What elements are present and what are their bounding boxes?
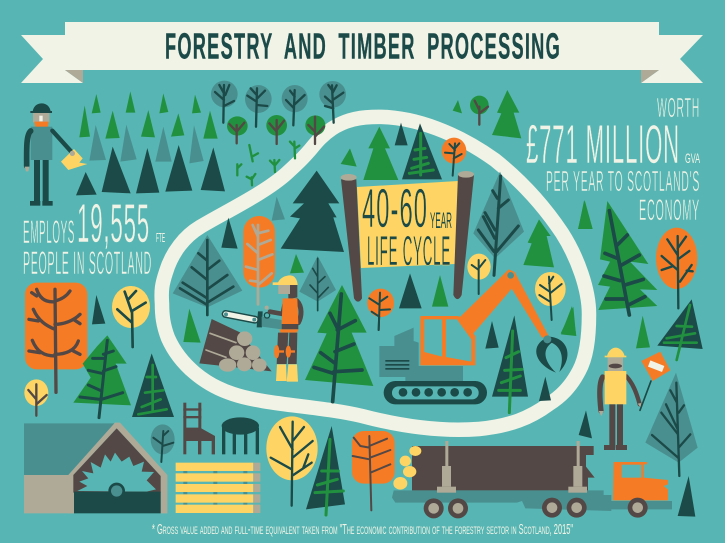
green sprouts — [237, 142, 299, 185]
orange tree by sign — [442, 138, 466, 176]
row of green round trees — [227, 115, 325, 144]
small triangle trees near spruce — [183, 197, 304, 343]
sign: life cycle: 40-60 — [362, 177, 428, 239]
orange oval tree right — [656, 228, 697, 308]
orange tree bottom — [352, 431, 395, 510]
green fir left — [73, 335, 131, 418]
stat: worth 771 million — [526, 92, 700, 227]
small conifer plantation — [76, 91, 225, 195]
dark conifer with green branches — [402, 123, 442, 179]
dark conifer with green branches left — [132, 353, 174, 417]
title banner — [21, 22, 703, 83]
sign right post — [453, 171, 474, 299]
small dark triangle left — [92, 295, 105, 324]
small green triangles right — [578, 201, 650, 348]
orange tree with khaki branches — [243, 216, 275, 304]
text: FTE — [156, 230, 165, 245]
truck stakes — [437, 441, 587, 493]
truck cab — [613, 462, 668, 500]
sign: life cycle: YEAR — [430, 208, 452, 233]
excavator boom and arm — [459, 269, 549, 338]
worker with stop sign — [599, 348, 670, 450]
excavator tracks — [384, 381, 487, 404]
small teal tree by sawmill — [151, 424, 175, 462]
small green tri top — [453, 100, 462, 113]
yellow small tree — [467, 254, 491, 294]
green spruce top right — [492, 90, 521, 138]
small yellow tree left — [24, 379, 48, 416]
text: 19,555 — [77, 192, 150, 254]
small dark trees bottom right — [579, 410, 695, 517]
lumberjack — [265, 275, 301, 382]
big orange tree left — [25, 283, 87, 392]
teal pine tree left — [173, 235, 242, 315]
teal tree right of sign — [473, 172, 524, 275]
dark conifer under excavator arm — [492, 315, 528, 413]
row of teal round trees — [211, 81, 346, 127]
green triangle right — [578, 200, 593, 229]
stat unit: GVA: GVA — [685, 150, 700, 166]
large yellow tree bottom — [266, 416, 318, 506]
icon: round table — [222, 417, 259, 454]
pile of cut logs — [199, 319, 272, 372]
forester with beard — [25, 103, 71, 206]
truck trailer bed — [392, 490, 672, 511]
truck timber load — [393, 446, 595, 490]
text: PEOPLE IN SCOTLAND — [23, 245, 152, 281]
dark conifer bottom — [306, 426, 345, 515]
excavator body — [379, 328, 463, 381]
big green fir right — [598, 201, 657, 315]
green spruce above sign — [363, 127, 398, 180]
green spruce inside road — [523, 219, 554, 267]
sign board — [357, 181, 458, 268]
orange tree below sign — [367, 290, 394, 330]
yellow tree by excavator arm — [535, 272, 566, 320]
logging truck — [392, 441, 672, 518]
excavator cabin — [420, 316, 475, 365]
dark spruce tree — [281, 171, 344, 252]
triangle trees below sign — [399, 273, 576, 335]
small orange tree — [367, 289, 394, 330]
yellow tree left — [112, 286, 150, 347]
sign left post — [341, 174, 362, 302]
sawmill with circular saw — [24, 423, 167, 513]
winding road loop — [162, 117, 589, 430]
stacked yellow planks — [176, 463, 260, 513]
green round tree top — [470, 96, 489, 125]
icon: wooden chair — [183, 403, 215, 454]
stat: employs 19,555: EMPLOYS — [23, 214, 75, 250]
icon: yellow watering can — [61, 149, 87, 170]
truck wheels — [424, 498, 648, 518]
stat: employs 19,555 — [23, 192, 165, 281]
large green fir — [305, 285, 373, 402]
teal tree bottom right — [645, 373, 698, 476]
sign: life cycle — [341, 171, 474, 302]
chainsaw — [224, 311, 282, 329]
excavator — [379, 269, 568, 404]
small trees above sign — [341, 123, 408, 167]
text: LIFE CYCLE — [367, 227, 451, 274]
excavator grapple — [536, 335, 568, 373]
dark triangle tree with green branches right — [657, 299, 703, 360]
small teal tree behind lumberjack — [299, 256, 336, 311]
saw blade — [77, 453, 156, 492]
small trees right of excavator — [485, 306, 576, 401]
